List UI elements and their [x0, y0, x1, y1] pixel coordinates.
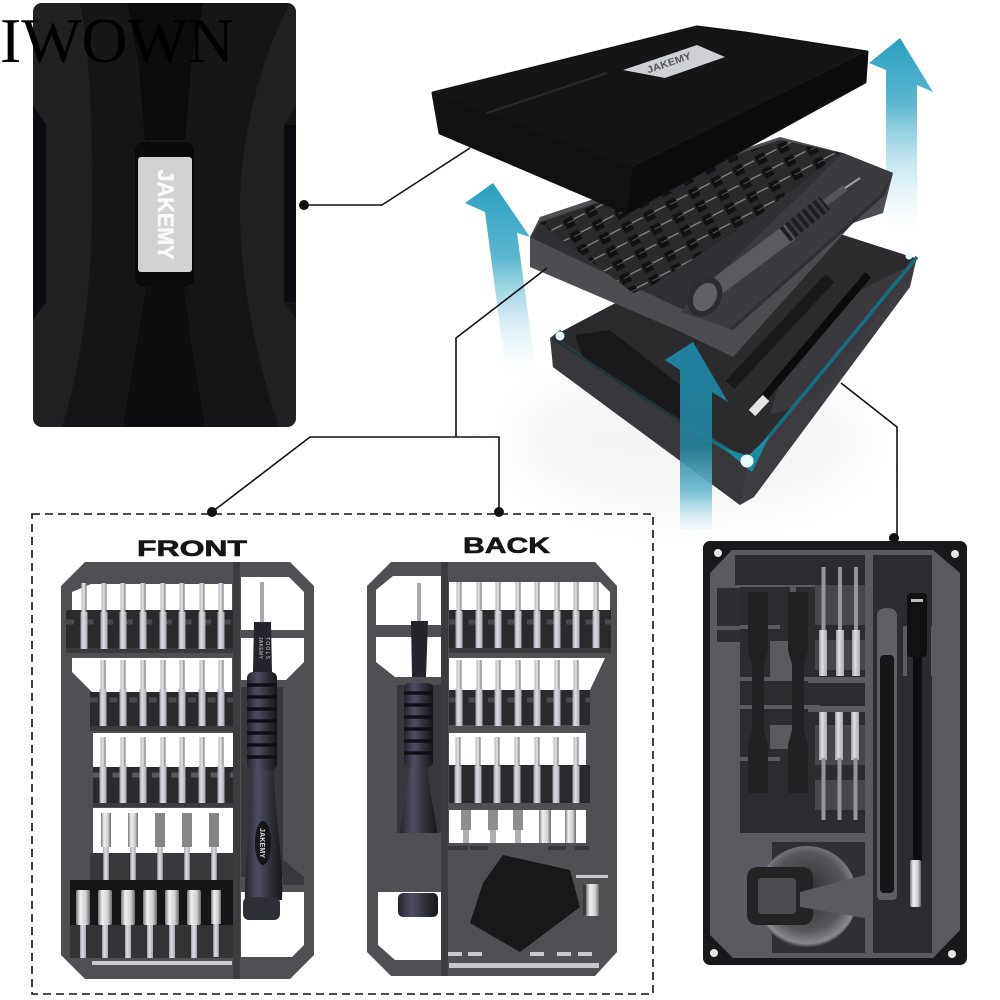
spare socket [583, 884, 599, 916]
back bits, row 3 [454, 737, 580, 803]
front bits, row 2 [100, 660, 224, 726]
pry tools [748, 592, 808, 793]
case bits, upper [819, 567, 860, 676]
arrow: right upward [869, 38, 933, 230]
panel: front tray [61, 562, 314, 979]
front screwdriver [243, 582, 282, 920]
heading: front: FRONT [137, 536, 248, 561]
connector: case to interior view [841, 383, 899, 543]
panel: closed lid, top view [33, 3, 296, 427]
front bits, row 1 [80, 583, 224, 649]
panel: back tray [367, 562, 617, 976]
watermark title: IWOWN [0, 5, 234, 76]
front screwdriver: JAKEMY [258, 828, 265, 858]
case black screwdriver [903, 593, 934, 907]
lower case screw holes [556, 252, 912, 468]
case bits, lower [819, 712, 859, 820]
front sockets, row 5 [76, 890, 221, 958]
arrow: left upward [465, 183, 536, 372]
dashed frame [32, 514, 653, 994]
soft shadow behind exploded view [520, 370, 860, 510]
panel: lower case interior [703, 541, 967, 965]
front sockets, row 4 [101, 813, 219, 880]
front screwdriver: TOOLS [264, 637, 270, 660]
lid brand badge [138, 157, 192, 272]
panel: exploded lid [433, 27, 867, 213]
back screwdriver [398, 583, 438, 917]
case screw holes [710, 549, 959, 958]
panel: exploded lower case [550, 233, 917, 505]
black pry shield [470, 855, 580, 952]
panel: exploded middle tray [530, 137, 893, 357]
tray screwdriver [681, 178, 860, 323]
lid badge, perspective [623, 45, 725, 78]
lid badge, perspective: JAKEMY [646, 51, 693, 76]
back bits, row 1 [456, 582, 600, 648]
suction cup [747, 846, 865, 948]
front bits, row 3 [100, 737, 224, 803]
front screwdriver: JAKEMY [257, 637, 263, 660]
connector: tray to front and back [207, 268, 547, 517]
connector: lid to top view [299, 148, 470, 210]
case tray tool [877, 608, 897, 900]
lid brand badge: JAKEMY [153, 170, 178, 260]
stowed black driver [730, 275, 868, 413]
arrow: centre upward [665, 342, 728, 530]
heading: back: BACK [463, 533, 550, 558]
back bits, row 2 [456, 660, 580, 726]
back sockets, row 4 [461, 810, 576, 843]
